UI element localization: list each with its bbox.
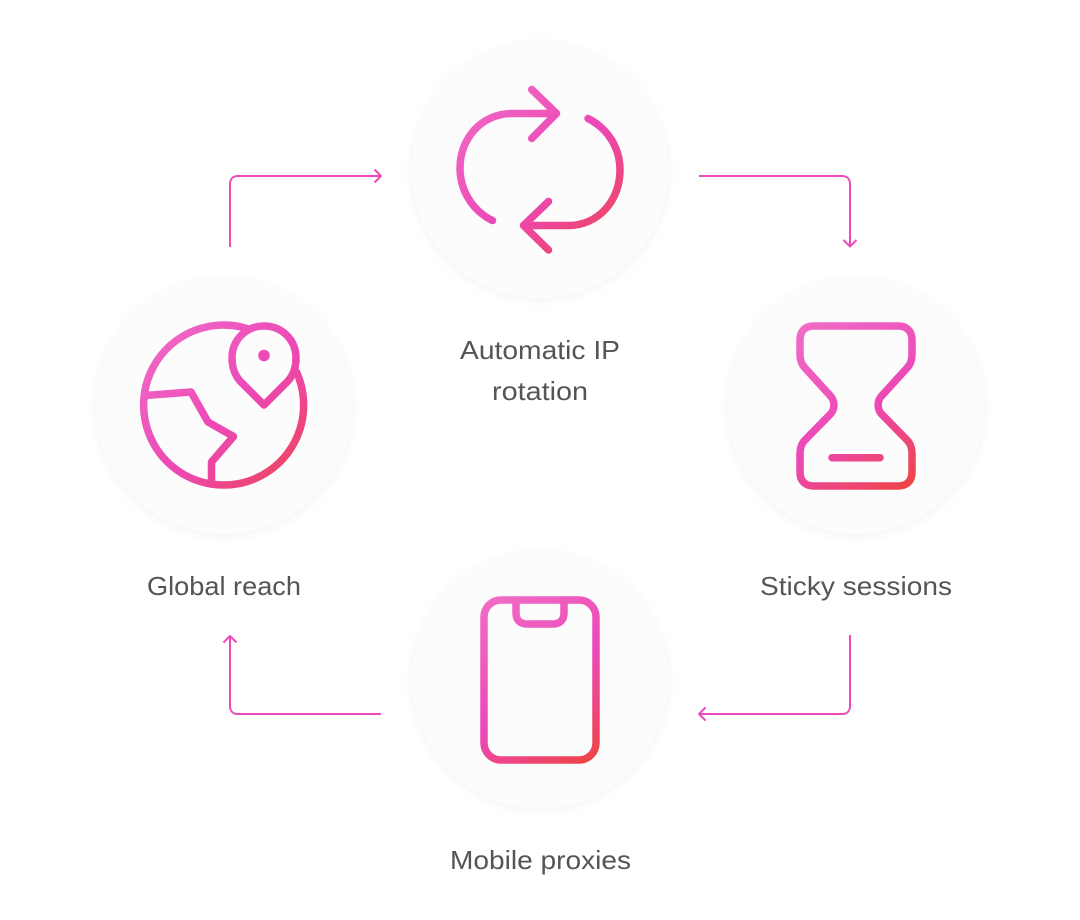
icon: globe with pin [144,325,304,485]
icon background: bottom circle [412,552,668,808]
label: Mobile proxies: Mobile proxies [450,845,631,875]
panel: global reach [96,278,352,601]
label: Sticky sessions: Sticky sessions [760,571,952,601]
icon: phone [484,600,596,760]
arrow: automatic IP rotation to sticky sessions [699,176,856,246]
icon background: top circle [412,42,668,298]
panel: automatic IP rotation [412,42,668,406]
panel: sticky sessions [728,278,984,601]
arrow: mobile proxies to global reach [224,636,381,714]
label: Global reach: Global reach [147,571,301,601]
icon background: left circle [96,278,352,534]
panel: mobile proxies [412,552,668,875]
icon background: right circle [728,278,984,534]
arrow: global reach to automatic IP rotation [230,170,381,247]
icon: hourglass [800,326,912,486]
label: Automatic IP rotation: Automatic IP [460,335,620,365]
arrow: sticky sessions to mobile proxies [699,635,850,720]
icon: rotation arrows [460,90,620,250]
label: Automatic IP rotation: rotation [492,376,588,406]
